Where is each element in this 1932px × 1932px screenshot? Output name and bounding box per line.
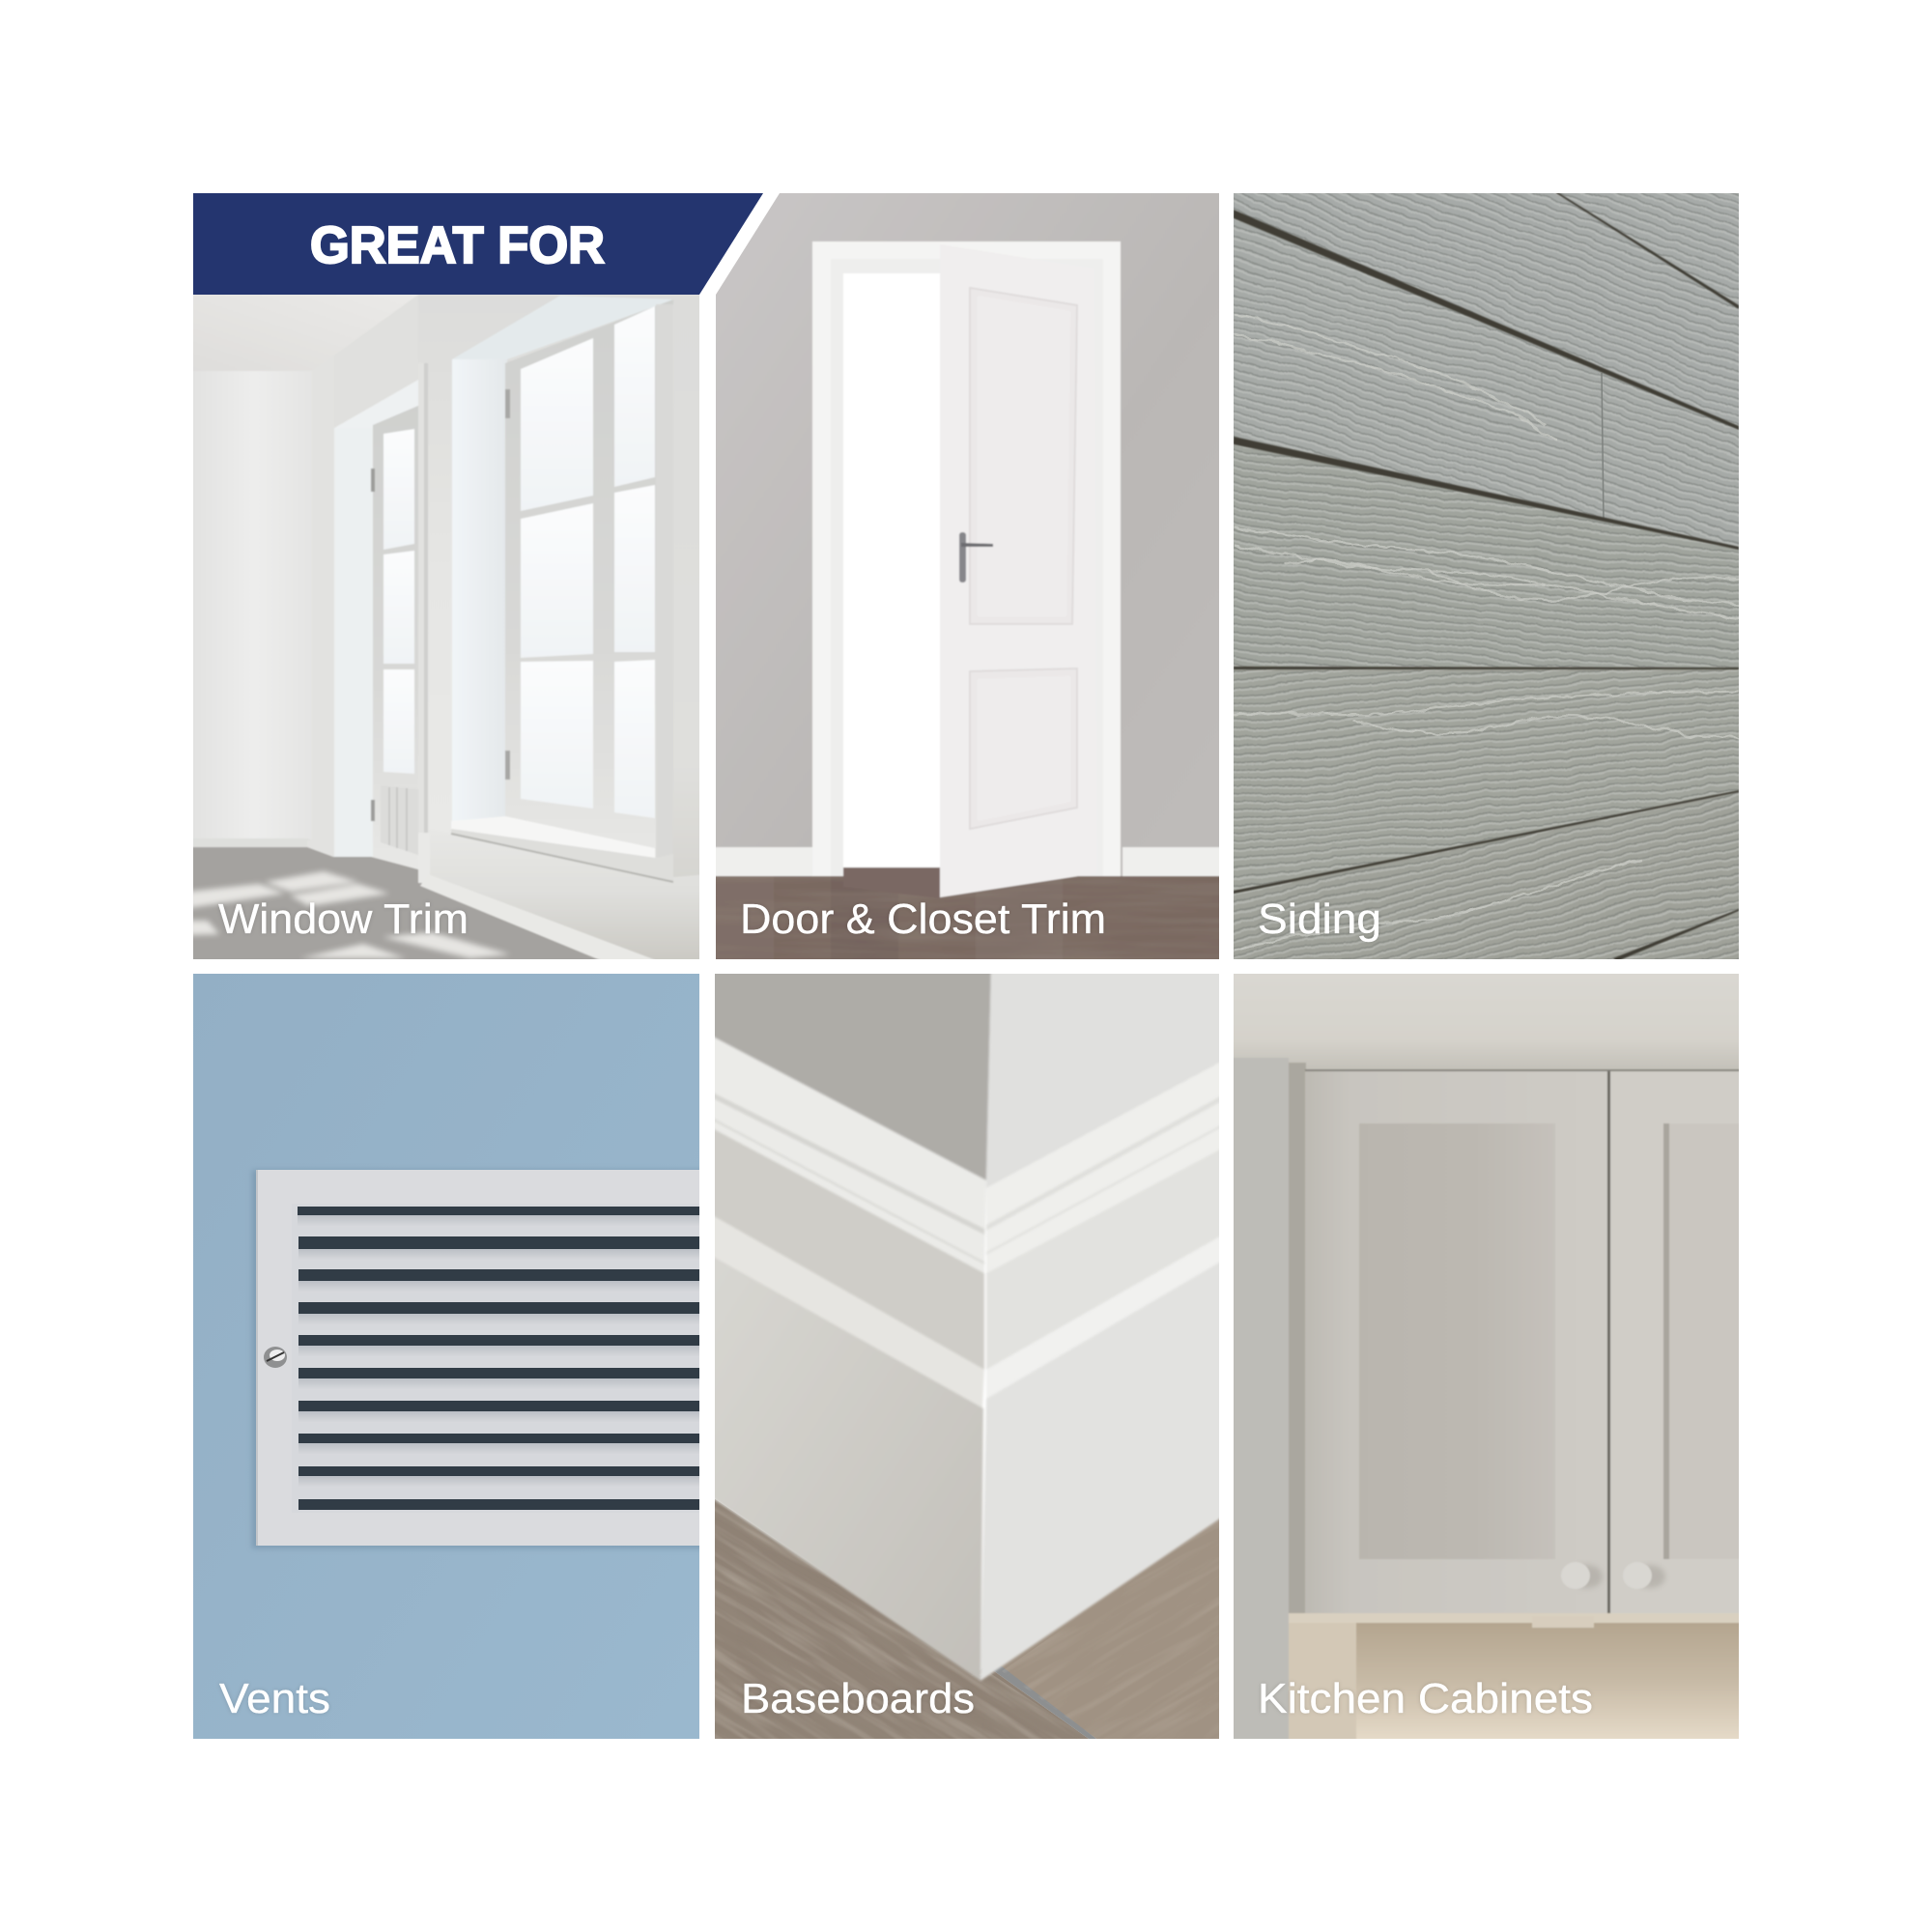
baseboard photo	[605, 966, 1314, 1915]
door leaf	[939, 875, 1078, 898]
panel: baseboards	[715, 974, 1219, 1739]
vent photo	[193, 974, 710, 1739]
banner: great for	[193, 193, 763, 295]
cabinet photo	[1227, 966, 1748, 1748]
wall and moulding	[705, 966, 1229, 1681]
cabinet door left	[1305, 1070, 1608, 1613]
door opening	[843, 273, 940, 867]
wide window	[452, 296, 674, 359]
left baseboard	[212, 838, 305, 847]
siding photo	[1234, 193, 1739, 959]
floor	[193, 846, 599, 959]
floor	[605, 1490, 1314, 1915]
floor planks	[710, 876, 1063, 966]
side wall	[307, 355, 334, 856]
siding joint	[1602, 373, 1604, 520]
door casing	[812, 242, 1121, 876]
cabinet knobs	[1561, 1562, 1665, 1589]
label: siding: Siding	[1258, 895, 1381, 943]
panel: window trim	[193, 295, 699, 959]
panel: siding	[1234, 193, 1739, 959]
vent grille	[256, 1170, 710, 1546]
door handle	[959, 532, 993, 582]
infographic: great for grid	[193, 193, 1739, 1739]
panel: door & closet trim	[710, 188, 1227, 966]
wood grain lines	[1234, 314, 1739, 952]
window sill	[451, 816, 655, 858]
banner heading: GREAT FOR	[310, 216, 605, 274]
label: window trim: Window Trim	[218, 895, 469, 943]
louvre slots	[298, 1207, 704, 1510]
board shadow lines	[1234, 191, 1739, 961]
label: kitchen cabinets: Kitchen Cabinets	[1258, 1675, 1593, 1722]
right wall strip	[673, 798, 699, 877]
casing between windows	[418, 295, 673, 879]
cabinet door right	[1610, 1070, 1748, 1613]
sun patches on floor	[188, 871, 510, 958]
board ripples	[1234, 193, 1739, 425]
panel: kitchen cabinets	[1227, 966, 1748, 1748]
label: baseboards: Baseboards	[741, 1675, 975, 1722]
narrow door window	[334, 380, 418, 428]
wall below window	[431, 867, 699, 959]
door photo	[710, 188, 1227, 966]
label: vents: Vents	[219, 1675, 330, 1722]
cabinet gap	[1607, 1070, 1610, 1613]
panel: vents	[193, 974, 710, 1739]
banner shape	[193, 193, 763, 295]
window trim photo	[193, 295, 699, 959]
vent screw	[264, 1347, 287, 1368]
label: door & closet trim: Door & Closet Trim	[740, 895, 1106, 943]
